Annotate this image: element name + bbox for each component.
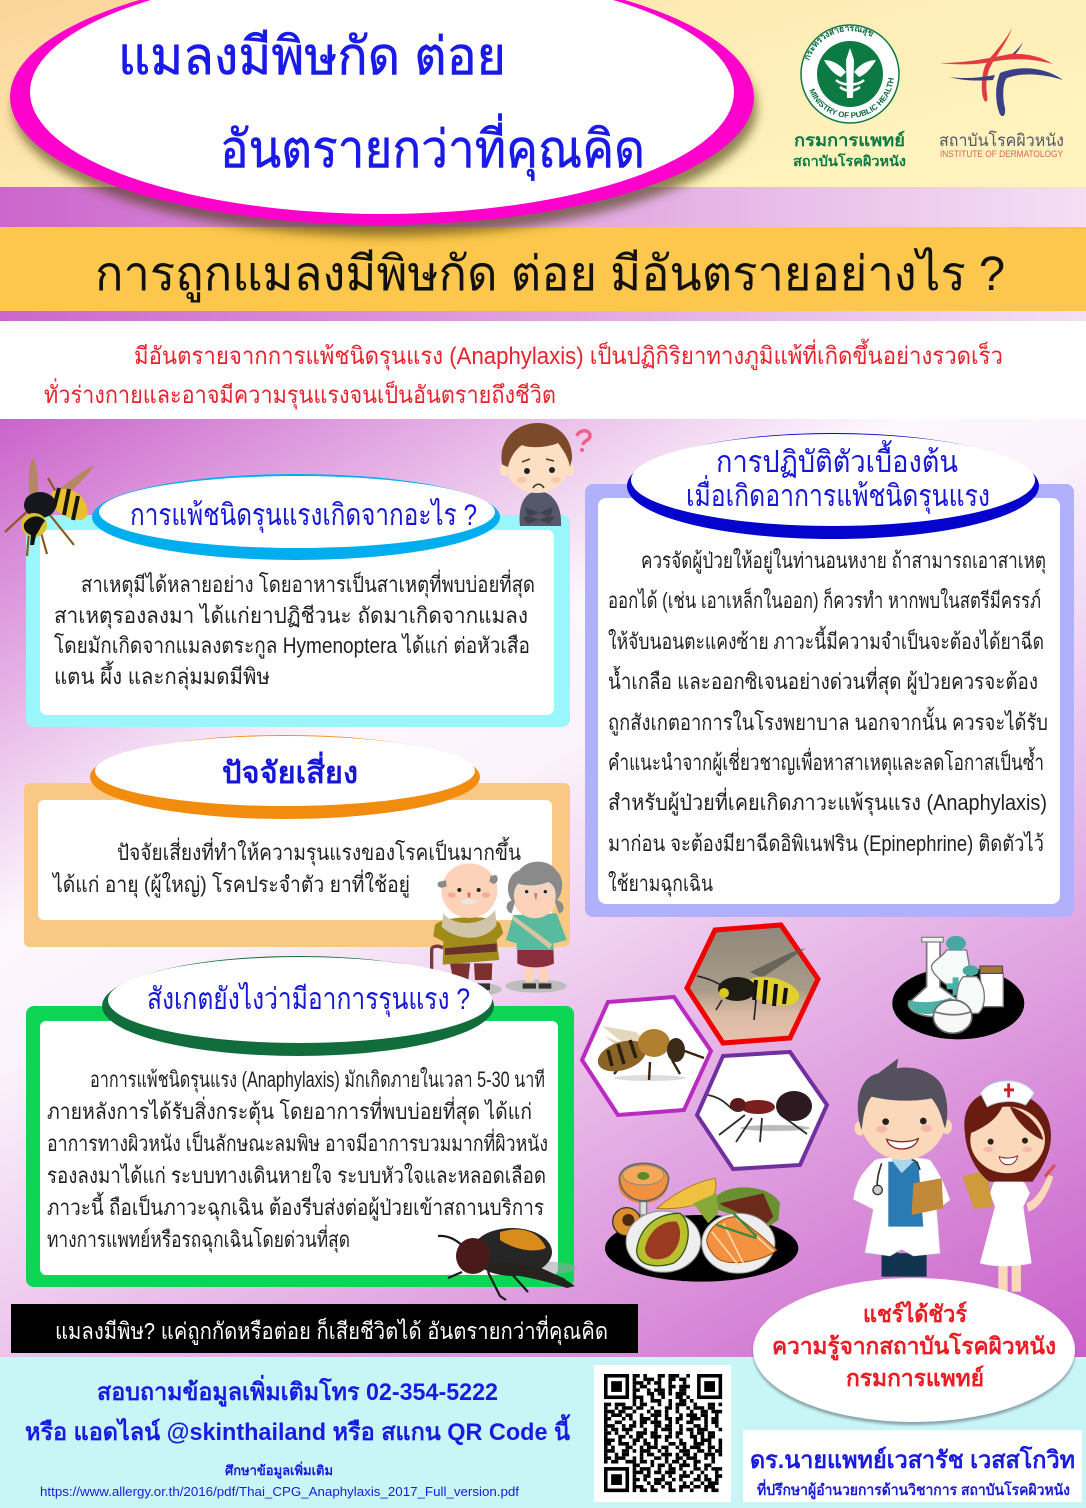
- heading text: การแพ้ชนิดรุนแรงเกิดจากอะไร ?: [130, 497, 477, 534]
- intro panel: ทั่วร่างกายและอาจมีความรุนแรงจนเป็นอันตรายถึงชีวิต: [44, 378, 556, 410]
- background: purple band: [0, 187, 1086, 228]
- hexagon: wasp photo: [687, 925, 818, 1043]
- author name: ดร.นายแพทย์เวสารัช เวสสโกวิท: [750, 1445, 1075, 1474]
- footer contact text: https://www.allergy.or.th/2016/pdf/Thai_CPG_Anaphylaxis_2017_Full_version.pdf: [40, 1484, 519, 1499]
- intro text: มีอันตรายจากการแพ้ชนิดรุนแรง (Anaphylaxis) เป็นปฏิกิริยาทางภูมิแพ้ที่เกิดขึ้นอย่างรวดเร็ว: [134, 338, 1003, 371]
- icon: elderly couple: [432, 862, 567, 995]
- share text: ความรู้จากสถาบันโรคผิวหนัง: [772, 1332, 1056, 1361]
- icon: medical bottles: [892, 936, 1024, 1039]
- panel body text: ใช้ยามฉุกเฉิน: [608, 871, 713, 897]
- panel body text: [47, 1067, 548, 1253]
- share text: แชร์ได้ชัวร์: [863, 1300, 968, 1327]
- panel body text: [608, 548, 1048, 897]
- subtitle band: [0, 227, 1086, 311]
- hexagon: ant: [697, 1052, 827, 1169]
- caption text: แมลงมีพิษ? แค่ถูกกัดหรือต่อย ก็เสียชีวิตได้ อันตรายกว่าที่คุณคิด: [55, 1315, 608, 1345]
- panel body text: ได้แก่ อายุ (ผู้ใหญ่) โรคประจำตัว ยาที่ใช้อยู่: [51, 869, 410, 898]
- logo text: สถาบันโรคผิวหนัง: [939, 130, 1064, 150]
- panel: what causes anaphylaxis: [26, 423, 590, 727]
- title ellipse: [10, 0, 757, 236]
- heading text: สังเกตยังไงว่ามีอาการรุนแรง ?: [147, 981, 470, 1018]
- share ellipse: [753, 1278, 1075, 1425]
- QR code: [594, 1365, 731, 1502]
- logo: Ministry of Public Health: กระทรวงสาธารณสุข: [805, 26, 874, 60]
- icon: fly / hornet: [438, 1228, 577, 1300]
- icon: wasp: [5, 458, 94, 556]
- panel: risk factors: [24, 735, 570, 947]
- title line 1: แมลงมีพิษกัด ต่อย: [118, 28, 506, 86]
- logo: Ministry of Public Health: MINISTRY OF PUBLIC HEALTH: [809, 78, 894, 118]
- heading text: ปัจจัยเสี่ยง: [222, 751, 358, 790]
- panel body text: อาการแพ้ชนิดรุนแรง (Anaphylaxis) มักเกิดภายในเวลา 5-30 นาที: [90, 1067, 545, 1093]
- footer contact text: สอบถามข้อมูลเพิ่มเติมโทร 02-354-5222: [97, 1374, 498, 1407]
- logo: Ministry of Public Health: [793, 24, 906, 169]
- background: thin purple band: [0, 310, 1086, 322]
- panel body text: โดยมักเกิดจากแมลงตระกูล Hymenoptera ได้แก่ ต่อหัวเสือ: [54, 633, 530, 659]
- heading ellipse: [92, 474, 500, 560]
- heading ellipse: [102, 956, 494, 1056]
- panel body text: ภายหลังการได้รับสิ่งกระตุ้น โดยอาการที่พบบ่อยที่สุด ได้แก่: [47, 1096, 532, 1125]
- icon: food plates: [605, 1163, 798, 1282]
- panel body text: สำหรับผู้ป่วยที่เคยเกิดภาวะแพ้รุนแรง (Anaphylaxis): [608, 787, 1047, 816]
- logo: Institute of Dermatology: INSTITUTE OF DERMATOLOGY: [940, 149, 1064, 160]
- background: main gradient area: [0, 419, 1086, 1358]
- panel body text: ปัจจัยเสี่ยงที่ทำให้ความรุนแรงของโรคเป็นมากขึ้น: [117, 837, 521, 866]
- share text: กรมการแพทย์: [846, 1365, 984, 1391]
- footer contact text: [25, 1374, 571, 1499]
- icon: nurse: [963, 1081, 1055, 1292]
- share text: [772, 1300, 1056, 1391]
- footer contact text: หรือ แอดไลน์ @skinthailand หรือ สแกน QR Code นี้: [25, 1413, 571, 1446]
- heading ellipse: [90, 735, 480, 819]
- heading ellipse: เมื่อเกิดอาการแพ้ชนิดรุนแรง: [686, 475, 990, 515]
- panel body text: [54, 569, 535, 690]
- heading text: การปฏิบัติตัวเบื้องต้น: [716, 440, 958, 479]
- heading ellipse: [627, 433, 1039, 539]
- black caption bar: [11, 1304, 638, 1353]
- hexagon: bee: [582, 997, 711, 1115]
- icon: doctor: [853, 1058, 952, 1277]
- logo text: กรมการแพทย์: [794, 130, 905, 150]
- panel: how to recognise severe symptoms: [26, 956, 574, 1287]
- background: footer: [0, 1357, 1086, 1508]
- panel body text: อาการทางผิวหนัง เป็นลักษณะลมพิษ อาจมีอาการบวมมากที่ผิวหนัง: [47, 1128, 548, 1156]
- logo: Institute of Dermatology: [939, 28, 1064, 160]
- background: header gradient: [0, 0, 1086, 188]
- panel: first aid: [585, 433, 1074, 917]
- panel body text: แตน ผึ้ง และกลุ่มมดมีพิษ: [54, 661, 270, 690]
- title line 2: อันตรายกว่าที่คุณคิด: [220, 113, 645, 181]
- panel body text: รองลงมาได้แก่ ระบบทางเดินหายใจ ระบบหัวใจและหลอดเลือด: [47, 1163, 546, 1188]
- panel body text: สาเหตุรองลงมา ได้แก่ยาปฏิชีวนะ ถัดมาเกิดจากแมลง: [54, 603, 528, 629]
- logo: Ministry of Public Health: สถาบันโรคผิวหนัง: [793, 152, 906, 169]
- subtitle text: การถูกแมลงมีพิษกัด ต่อย มีอันตรายอย่างไร ?: [95, 246, 1005, 303]
- icon: worried boy: [500, 423, 590, 526]
- panel body text: ภาวะนี้ ถือเป็นภาวะฉุกเฉิน ต้องรีบส่งต่อผู้ป่วยเข้าสถานบริการ: [47, 1192, 544, 1221]
- author card: [743, 1430, 1082, 1502]
- intro panel: [0, 321, 1086, 419]
- panel body text: สาเหตุมีได้หลายอย่าง โดยอาหารเป็นสาเหตุที่พบบ่อยที่สุด: [81, 569, 535, 598]
- footer contact text: ศึกษาข้อมูลเพิ่มเติม: [225, 1461, 333, 1479]
- panel body text: [51, 837, 521, 898]
- panel body text: ทางการแพทย์หรือรถฉุกเฉินโดยด่วนที่สุด: [47, 1224, 350, 1253]
- author role: ที่ปรึกษาผู้อำนวยการด้านวิชาการ สถาบันโรคผิวหนัง: [757, 1479, 1070, 1500]
